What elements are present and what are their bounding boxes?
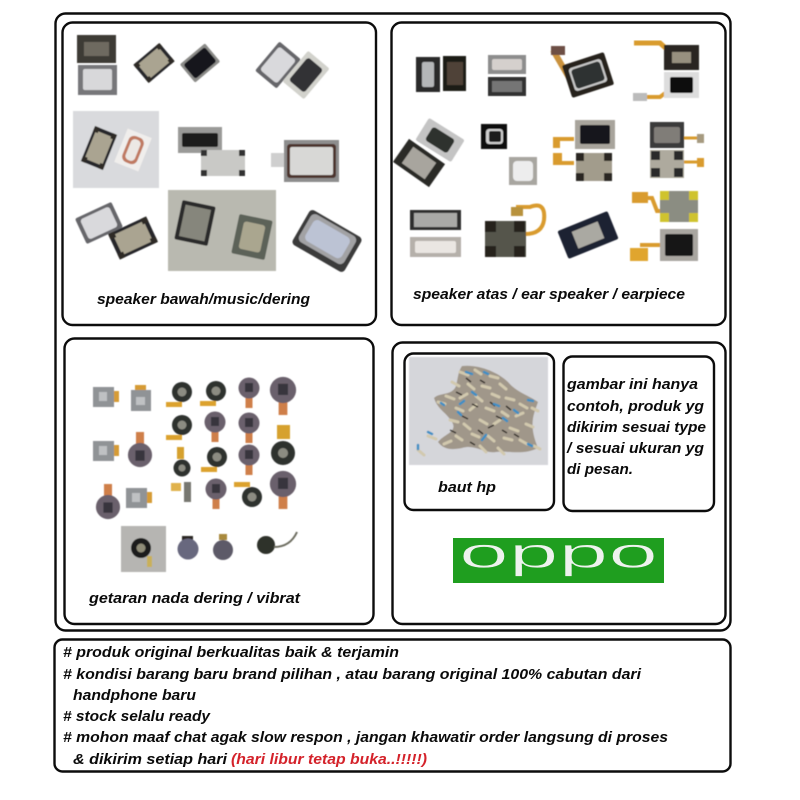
vibration motor grid	[93, 377, 296, 519]
note text: dikirim sesuai type	[567, 419, 706, 436]
speaker photos row 3	[75, 190, 363, 273]
sub panel: keterangan	[564, 356, 714, 511]
label: baut hp: baut hp	[438, 479, 496, 496]
earpiece photos row 3	[410, 191, 698, 261]
logo: oppo	[453, 530, 664, 583]
note text: gambar ini hanya	[566, 376, 698, 393]
label: getaran: getaran nada dering / vibrat	[88, 590, 301, 607]
red note: (hari libur tetap buka..!!!!!)	[231, 751, 427, 768]
sub panel: baut hp	[404, 354, 554, 510]
label: speaker atas: speaker atas / ear speaker / earpiece	[413, 286, 685, 303]
panel: speaker bawah	[62, 22, 376, 325]
note text	[566, 376, 706, 478]
product notes	[63, 644, 668, 768]
outer frame	[56, 14, 730, 630]
logo: oppo: oppo	[459, 530, 658, 578]
note text: di pesan.	[567, 461, 633, 478]
note text: contoh, produk yg	[567, 398, 704, 415]
photo: screws	[409, 357, 548, 465]
vibration motor photos	[121, 526, 297, 572]
panel: getaran	[64, 338, 374, 624]
speaker photos row 1	[77, 35, 330, 99]
panel: keterangan produk	[54, 640, 730, 772]
product notes: handphone baru	[73, 687, 196, 704]
earpiece photos row 2	[393, 118, 704, 187]
product notes: & dikirim setiap hari	[73, 751, 228, 768]
panel: speaker atas	[392, 22, 726, 325]
speaker photos row 2	[73, 111, 339, 188]
product notes: # kondisi barang baru brand pilihan , atau barang original 100% cabutan dari	[63, 666, 642, 683]
label: speaker bawah: speaker bawah/music/dering	[97, 291, 310, 308]
note text: / sesuai ukuran yg	[566, 440, 704, 457]
product notes: # stock selalu ready	[63, 708, 211, 725]
earpiece photos row 1	[416, 43, 699, 101]
product notes: # mohon maaf chat agak slow respon , jangan khawatir order langsung di proses	[63, 729, 668, 746]
product notes: # produk original berkualitas baik & terjamin	[63, 644, 399, 661]
panel: baut dan keterangan	[392, 342, 726, 624]
